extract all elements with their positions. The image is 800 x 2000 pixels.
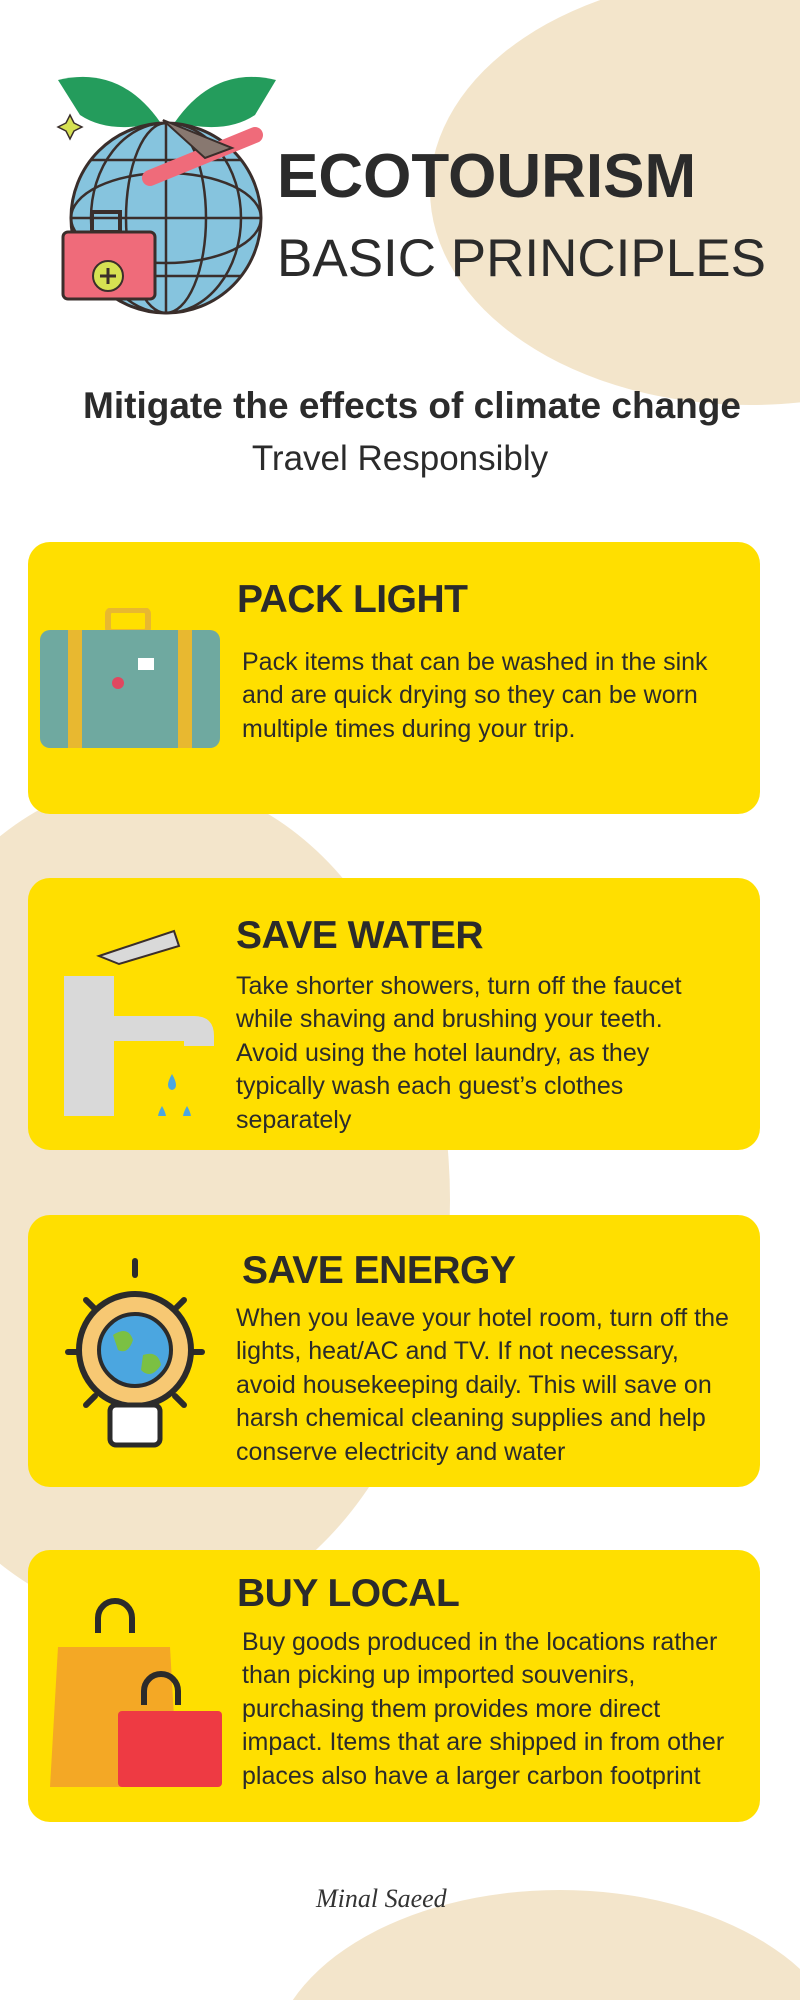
text: places also have a larger carbon footprint xyxy=(242,1762,701,1790)
heading: SAVE WATER xyxy=(236,914,483,957)
icon: suitcase xyxy=(40,608,220,748)
text: Pack items that can be washed in the sink xyxy=(242,648,708,676)
text xyxy=(242,648,708,743)
text: and are quick drying so they can be worn xyxy=(242,681,698,709)
signature: Minal Saeed xyxy=(316,1884,447,1913)
icon: lightbulb xyxy=(65,1258,205,1448)
panel: buy local xyxy=(28,1550,760,1822)
text: impact. Items that are shipped in from other xyxy=(242,1728,724,1756)
text: purchasing them provides more direct xyxy=(242,1695,660,1723)
text: while shaving and brushing your teeth. xyxy=(236,1005,663,1033)
text xyxy=(236,1304,729,1466)
text: Avoid using the hotel laundry, as they xyxy=(236,1039,649,1067)
text: When you leave your hotel room, turn off the xyxy=(236,1304,729,1332)
text: than picking up imported souvenirs, xyxy=(242,1661,635,1689)
heading: BUY LOCAL xyxy=(237,1572,459,1615)
text: conserve electricity and water xyxy=(236,1438,565,1466)
icon: globe with leaves xyxy=(56,76,276,314)
text: harsh chemical cleaning supplies and help xyxy=(236,1404,706,1432)
text: typically wash each guest’s clothes xyxy=(236,1072,623,1100)
text: Take shorter showers, turn off the faucet xyxy=(236,972,682,1000)
panel: save energy xyxy=(28,1215,760,1487)
title: ECOTOURISM xyxy=(277,142,696,211)
tagline 2: Travel Responsibly xyxy=(252,439,548,478)
text: avoid housekeeping daily. This will save on xyxy=(236,1371,712,1399)
text xyxy=(242,1628,724,1790)
tagline: Mitigate the effects of climate change xyxy=(83,385,741,426)
heading: PACK LIGHT xyxy=(237,578,467,621)
text: multiple times during your trip. xyxy=(242,715,575,743)
text xyxy=(236,972,682,1134)
panel: pack light xyxy=(28,542,760,814)
panel: save water xyxy=(28,878,760,1150)
heading: SAVE ENERGY xyxy=(242,1249,515,1292)
text: separately xyxy=(236,1106,351,1134)
text: lights, heat/AC and TV. If not necessary, xyxy=(236,1337,679,1365)
subtitle: basic principles: BASIC PRINCIPLES xyxy=(277,229,766,288)
icon: shopping bags xyxy=(50,1598,222,1787)
icon: faucet xyxy=(64,930,214,1116)
text: Buy goods produced in the locations rather xyxy=(242,1628,717,1656)
